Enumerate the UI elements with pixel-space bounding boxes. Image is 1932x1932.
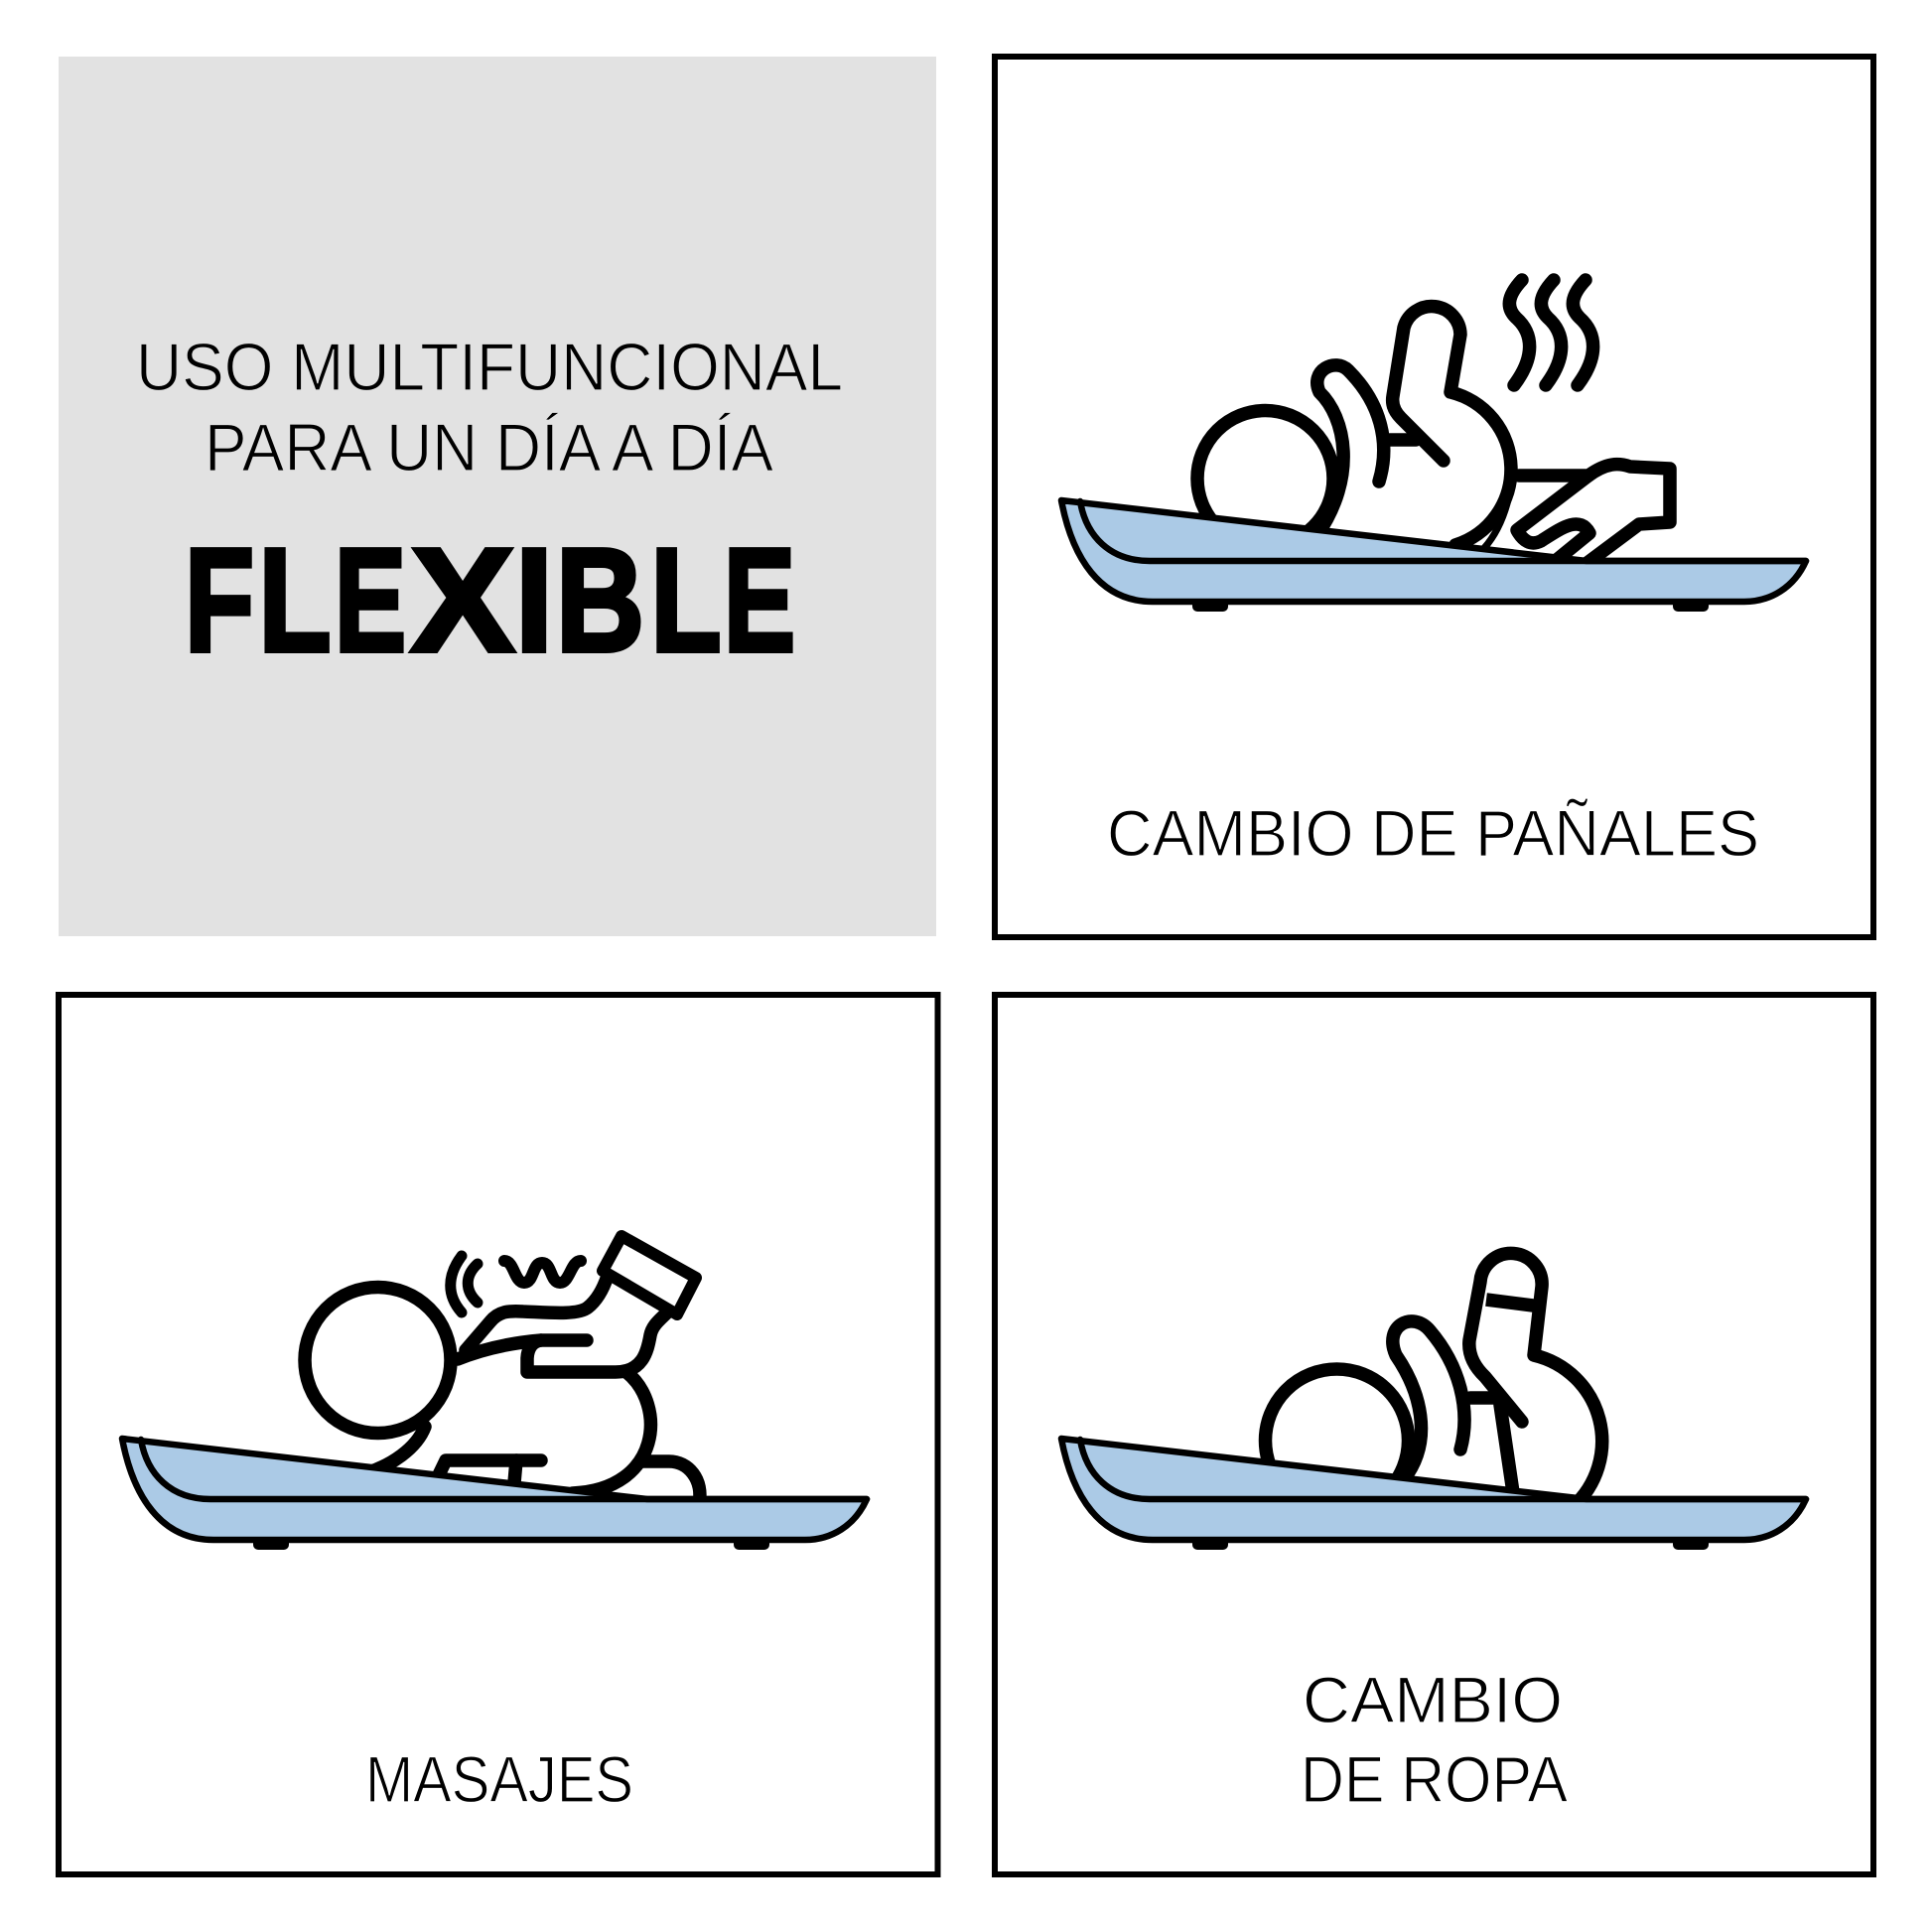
panel: diaper change bbox=[995, 57, 1873, 937]
main title: F bbox=[185, 518, 254, 683]
main title: B bbox=[556, 518, 644, 683]
tray bbox=[122, 1439, 867, 1550]
main title: E bbox=[724, 518, 795, 683]
main title: I bbox=[515, 518, 553, 683]
heading line 1: USO MULTIFUNCIONAL bbox=[136, 330, 843, 405]
panel: massage bbox=[59, 995, 937, 1874]
heading line 2: PARA UN DÍA A DÍA bbox=[205, 410, 774, 485]
label: DE ROPA bbox=[1301, 1742, 1568, 1816]
tray bbox=[1061, 500, 1806, 612]
tray bbox=[1061, 1439, 1806, 1550]
main title: L bbox=[651, 518, 721, 683]
main title: X bbox=[411, 518, 514, 683]
icon: baby massage bbox=[122, 1236, 867, 1550]
main title: L bbox=[258, 518, 332, 683]
panel: title bbox=[59, 57, 936, 936]
icon: baby changing clothes bbox=[1061, 1253, 1806, 1550]
main title: E bbox=[335, 518, 406, 683]
icon: baby diaper change bbox=[1061, 280, 1806, 612]
label: CAMBIO bbox=[1303, 1663, 1563, 1736]
panel: changing clothes bbox=[995, 995, 1873, 1874]
label: MASAJES bbox=[365, 1742, 633, 1816]
label: CAMBIO DE PAÑALES bbox=[1107, 796, 1759, 870]
